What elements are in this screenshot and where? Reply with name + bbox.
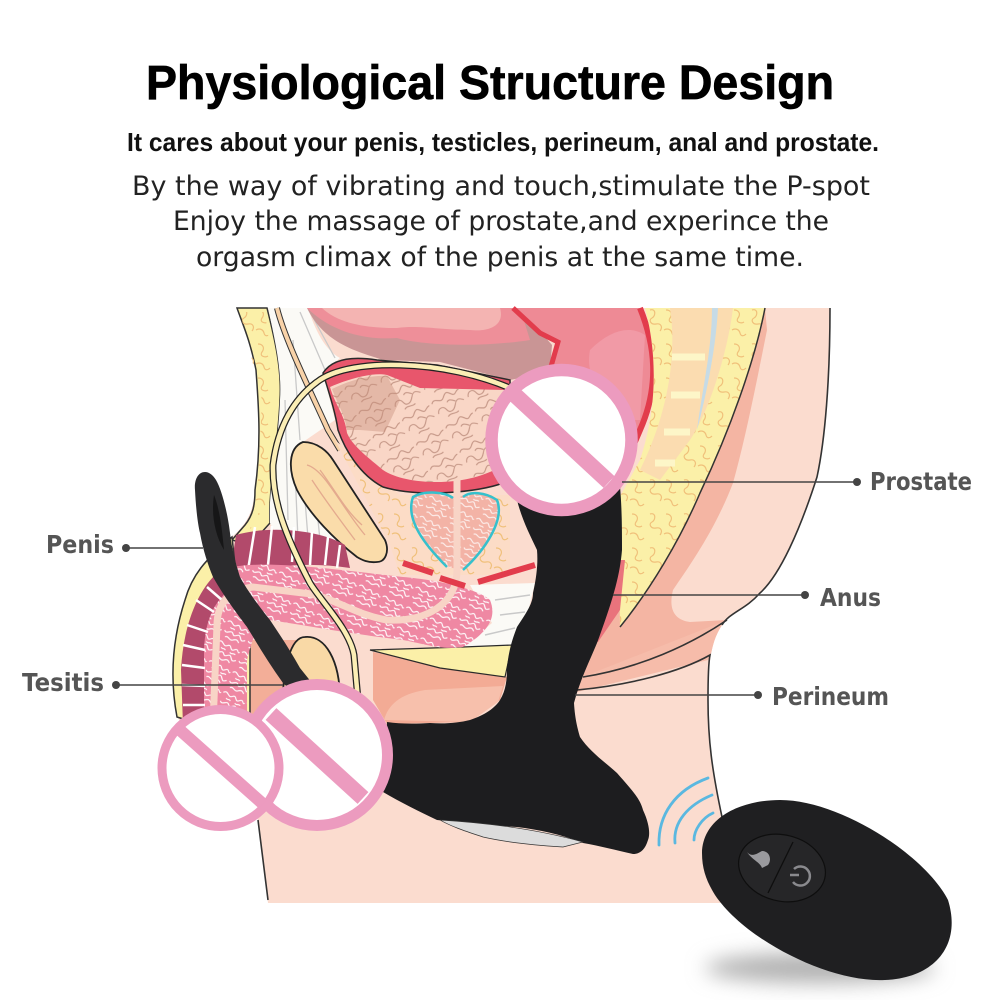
device shaft and base <box>383 486 649 854</box>
pubic bone <box>291 442 387 562</box>
spermatic loop <box>273 365 512 700</box>
scrotum stripes <box>181 575 230 725</box>
censor circle: top <box>492 370 632 510</box>
title: Physiological Structure Design <box>146 57 834 110</box>
label: Anus: Anus <box>820 583 881 612</box>
tendon area with strands <box>268 308 345 552</box>
description text: By the way of vibrating and touch,stimulate the P-spot <box>132 171 870 202</box>
device <box>195 472 649 854</box>
label: Tesitis: Tesitis <box>22 668 104 697</box>
right spine and fat layer <box>618 308 765 627</box>
testis <box>283 637 340 720</box>
remote shadow <box>705 953 935 983</box>
perineum fat <box>370 645 512 677</box>
label: Prostate: Prostate <box>870 467 972 496</box>
salmon band along back <box>583 308 767 677</box>
blue gland outline <box>411 493 499 570</box>
remote buttons <box>731 825 833 911</box>
scrotum salmon area <box>250 640 296 714</box>
body silhouette <box>160 300 840 910</box>
red dashes <box>403 563 535 586</box>
label: Anus <box>613 583 881 612</box>
icon: power <box>790 867 810 886</box>
subtitle: It cares about your penis, testicles, perineum, anal and prostate. <box>127 127 879 157</box>
device arm ring <box>195 472 312 695</box>
erectile tissue fan <box>233 530 350 575</box>
prostate gland <box>411 493 498 570</box>
description text <box>132 171 870 273</box>
label: Perineum <box>575 682 889 711</box>
label: Tesitis <box>22 668 283 697</box>
description text: Enjoy the massage of prostate,and experince the <box>173 206 829 237</box>
label: Penis <box>46 530 203 559</box>
bladder interior <box>330 374 505 482</box>
icon: mode <box>747 851 770 868</box>
remote control <box>702 800 952 980</box>
body outline <box>258 308 830 900</box>
left fat band <box>232 308 280 545</box>
censor circle: right <box>246 684 388 826</box>
perineum lines <box>577 620 727 817</box>
lower pelvic white area <box>463 583 535 647</box>
anal tissue <box>590 560 625 642</box>
upper organ <box>307 308 552 380</box>
fat around prostate <box>335 440 510 575</box>
urethra <box>213 480 457 725</box>
rectum <box>515 308 653 480</box>
metal band <box>440 820 583 847</box>
perineum salmon area <box>373 652 507 724</box>
yellow outer band of scrotum <box>173 537 250 740</box>
label: Penis: Penis <box>46 530 114 559</box>
corpus tissue <box>200 565 492 725</box>
bladder wall <box>323 358 512 493</box>
label: Prostate <box>622 467 972 496</box>
icon: signal waves <box>659 778 713 845</box>
anatomical diagram <box>160 300 840 910</box>
label: Perineum: Perineum <box>772 682 889 711</box>
description text: orgasm climax of the penis at the same time. <box>196 242 804 273</box>
censor circle: left <box>162 710 279 826</box>
